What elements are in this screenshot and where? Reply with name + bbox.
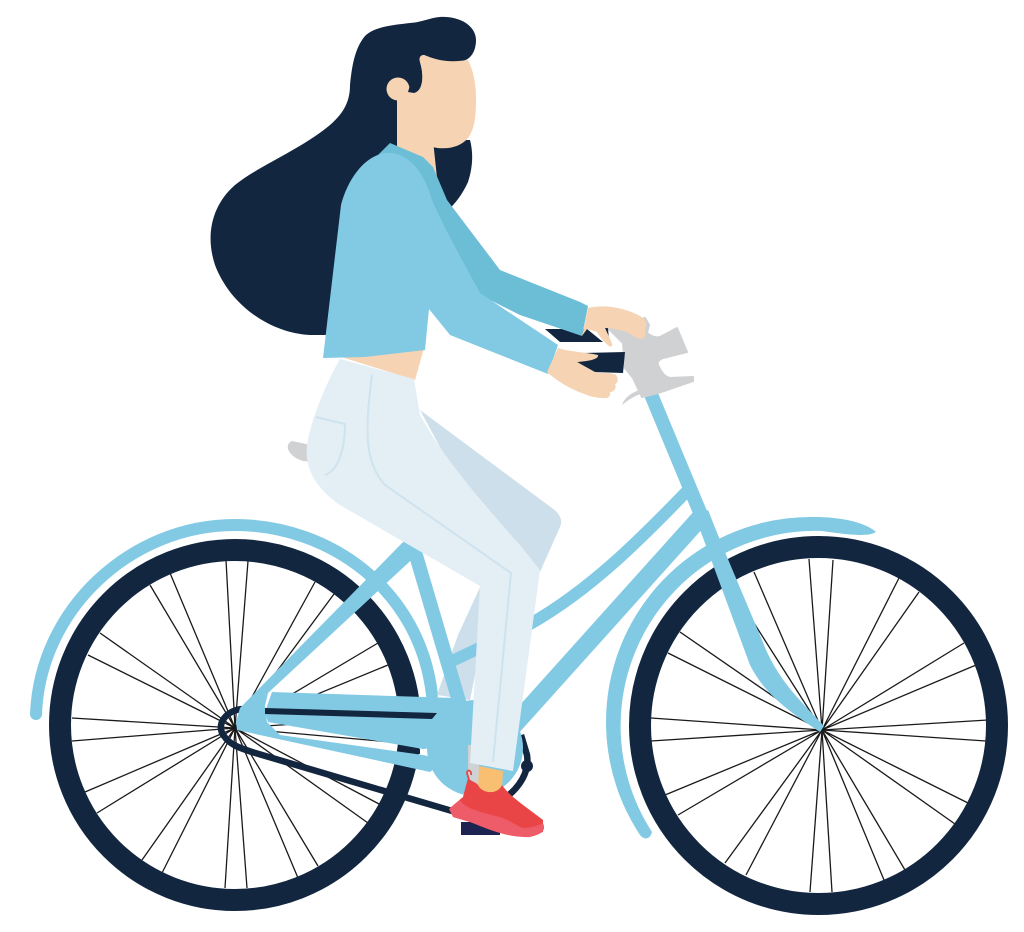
rear wheel bbox=[60, 550, 410, 900]
midriff bbox=[335, 348, 424, 380]
top tube bbox=[450, 488, 690, 662]
seat stay and lower stay bbox=[236, 538, 445, 772]
rear lower leg, behind frame bbox=[437, 583, 482, 700]
jacket body bbox=[323, 153, 558, 374]
sneaker bbox=[449, 771, 544, 837]
front wheel spokes bbox=[651, 559, 988, 892]
chainring cover bbox=[427, 700, 523, 796]
pocket bbox=[316, 417, 345, 475]
sneaker sole bbox=[449, 800, 544, 837]
ear bbox=[386, 78, 410, 100]
back leg shading bbox=[420, 410, 561, 572]
sneaker upper bbox=[450, 778, 543, 837]
rear fender bbox=[36, 525, 432, 714]
head tube bbox=[650, 392, 704, 522]
fork bbox=[694, 510, 824, 732]
person bbox=[307, 55, 646, 837]
chain knob bbox=[521, 760, 533, 772]
jacket back sleeve bbox=[378, 143, 588, 336]
rear wheel spokes bbox=[72, 560, 390, 888]
upper grip bbox=[545, 329, 603, 342]
front fender bbox=[606, 517, 876, 838]
front tyre bbox=[640, 547, 997, 904]
chain guard slot bbox=[398, 747, 420, 754]
face bbox=[397, 55, 476, 148]
hair bbox=[211, 17, 476, 335]
lower hand bbox=[547, 348, 618, 398]
chain guard stripe bbox=[265, 708, 437, 719]
rear tyre bbox=[60, 550, 410, 900]
lower grip bbox=[577, 352, 625, 373]
chain guard upper bar bbox=[265, 692, 470, 749]
handlebar curl bbox=[622, 390, 641, 405]
shoe loop bbox=[467, 771, 471, 780]
seat tube bbox=[410, 535, 466, 725]
ankle bbox=[478, 766, 503, 793]
neck bbox=[397, 95, 437, 178]
trousers bbox=[307, 359, 540, 771]
trouser seam bbox=[367, 375, 511, 762]
upper hand bbox=[582, 306, 646, 347]
grey sock bbox=[468, 745, 480, 785]
upper grip end bbox=[604, 328, 609, 340]
handlebar stem bbox=[608, 318, 693, 397]
chain bbox=[221, 709, 527, 811]
bicycle bbox=[36, 318, 997, 904]
front wheel bbox=[640, 547, 997, 904]
saddle bbox=[288, 441, 325, 463]
pedal bbox=[461, 822, 500, 835]
down tube bbox=[505, 518, 700, 735]
ear hair detail bbox=[408, 82, 421, 93]
